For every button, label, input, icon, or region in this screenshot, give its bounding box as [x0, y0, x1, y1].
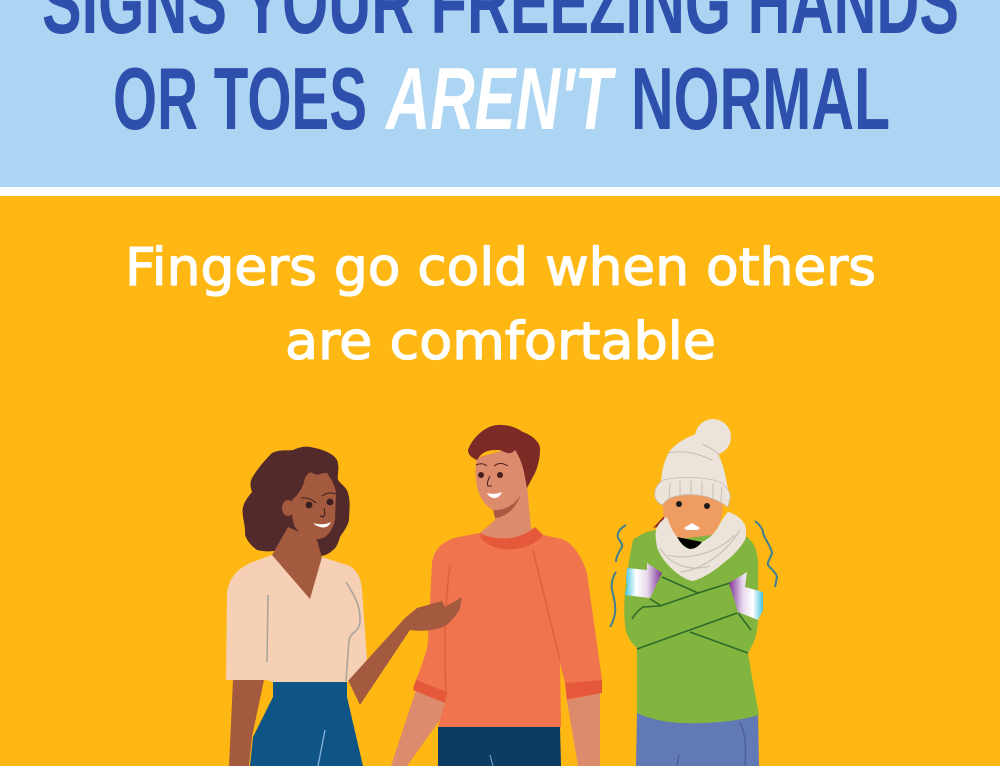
beanie — [661, 433, 728, 490]
ear — [520, 463, 534, 477]
hair — [468, 425, 540, 488]
face — [663, 495, 723, 540]
eyes and mouth — [478, 472, 484, 478]
blouse folds — [267, 582, 360, 681]
trousers — [636, 712, 759, 766]
hair — [243, 447, 350, 556]
skirt — [250, 682, 363, 766]
shiver lines — [610, 521, 777, 627]
collar — [480, 527, 543, 549]
beanie brim — [655, 477, 730, 507]
illustration: man in orange sweater — [391, 425, 602, 766]
right arm — [566, 690, 600, 766]
eyes and mouth — [306, 502, 312, 508]
scarf — [656, 512, 746, 581]
panel: blue header background — [0, 0, 1000, 187]
chin shadow — [493, 496, 520, 518]
illustration: shivering person — [610, 419, 777, 766]
neck — [480, 485, 543, 546]
green sweater — [624, 530, 759, 723]
subtitle text — [125, 238, 876, 372]
sweater seams — [445, 550, 560, 692]
beanie pompom — [695, 419, 731, 455]
title — [42, 0, 959, 148]
arm reaching out with hand — [348, 597, 462, 705]
subtitle text: are comfortable — [285, 312, 716, 372]
title: OR TOES — [113, 49, 367, 148]
face — [476, 446, 527, 510]
subtitle text: Fingers go cold when others — [125, 238, 876, 298]
sweater — [413, 533, 602, 727]
ear — [282, 500, 294, 516]
neck — [272, 527, 322, 600]
illustration: woman talking — [226, 447, 462, 766]
hair — [653, 515, 672, 528]
blouse — [226, 555, 367, 682]
back arm — [229, 680, 264, 766]
panel: yellow background — [0, 196, 1000, 766]
crossed arm lines — [632, 577, 751, 653]
black collar — [677, 537, 702, 549]
eyes and mouth — [676, 501, 682, 507]
left arm — [391, 690, 445, 766]
left glove — [625, 563, 662, 598]
right glove — [729, 572, 763, 620]
trousers — [438, 727, 561, 766]
sleeve cuffs — [413, 680, 447, 703]
face — [292, 473, 336, 539]
title: AREN'T — [385, 49, 616, 148]
